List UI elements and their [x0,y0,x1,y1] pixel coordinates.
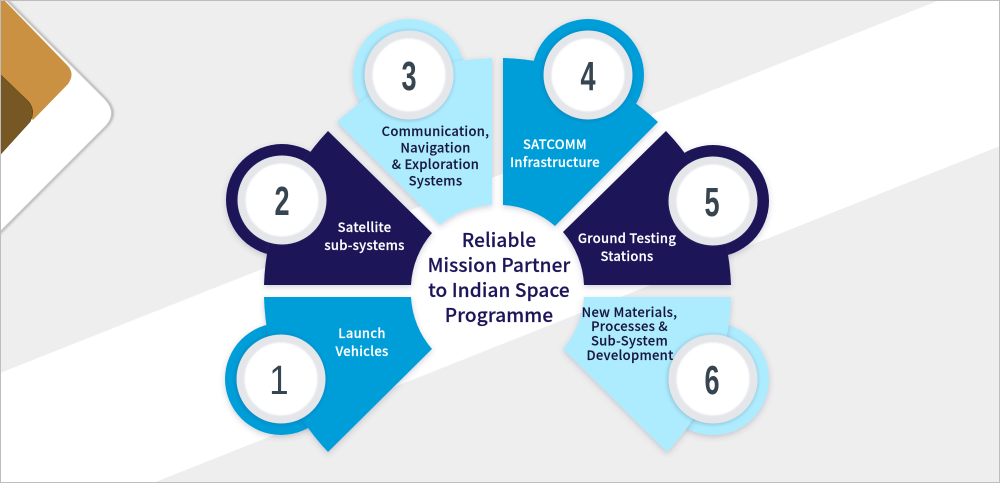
segment 3: Communication, Navigation and Exploration Systems: Navigation [400,138,471,156]
center heading: Reliable [462,226,536,253]
segment 4: SATCOMM Infrastructure [503,19,658,226]
segment 2: Satellite sub-systems [226,131,432,285]
segment 6: New Materials, Processes and Sub-System Development: Development [586,345,674,364]
segment 1: Launch Vehicles [225,297,432,452]
segment 5: Ground Testing Stations: Stations [600,246,654,265]
segment 1: Launch Vehicles: Vehicles [334,341,389,360]
segment 4: SATCOMM Infrastructure: Infrastructure [510,152,600,171]
segment 4: SATCOMM Infrastructure: SATCOMM [523,134,587,153]
segment 3: Communication, Navigation and Exploration Systems: 3 [401,55,417,99]
center heading: Mission Partner [428,251,570,278]
segment 6: New Materials, Processes and Sub-System Development: Sub-System [591,330,668,350]
segment 2: Satellite sub-systems: 2 [274,180,290,224]
segment 6: New Materials, Processes and Sub-System Development [563,297,769,452]
segment 3: Communication, Navigation and Exploration Systems: Systems [409,170,462,190]
segment 3: Communication, Navigation and Exploration Systems: & Exploration [392,154,479,173]
segment 5: Ground Testing Stations [563,131,769,285]
segment 5: Ground Testing Stations: 5 [704,181,720,225]
segment 3: Communication, Navigation and Exploration Systems: Communication, [382,121,489,140]
segment 6: New Materials, Processes and Sub-System Development: New Materials, [582,302,677,321]
center heading: to Indian Space [428,276,570,303]
segment 1: Launch Vehicles: 1 [269,358,289,404]
decorative diamond corner [0,0,112,238]
segment 5: Ground Testing Stations: Ground Testing [578,228,676,247]
segment 2: Satellite sub-systems: Satellite [338,217,391,236]
segment 6: New Materials, Processes and Sub-System Development: 6 [704,359,720,403]
segment 1: Launch Vehicles: Launch [338,323,386,342]
segment 4: SATCOMM Infrastructure: 4 [580,55,596,99]
segment 6: New Materials, Processes and Sub-System Development: Processes & [591,316,668,335]
center heading [428,226,570,328]
segment 2: Satellite sub-systems: sub-systems [324,235,405,254]
segment 3: Communication, Navigation and Exploration Systems [337,19,492,225]
center heading: Programme [445,301,553,328]
